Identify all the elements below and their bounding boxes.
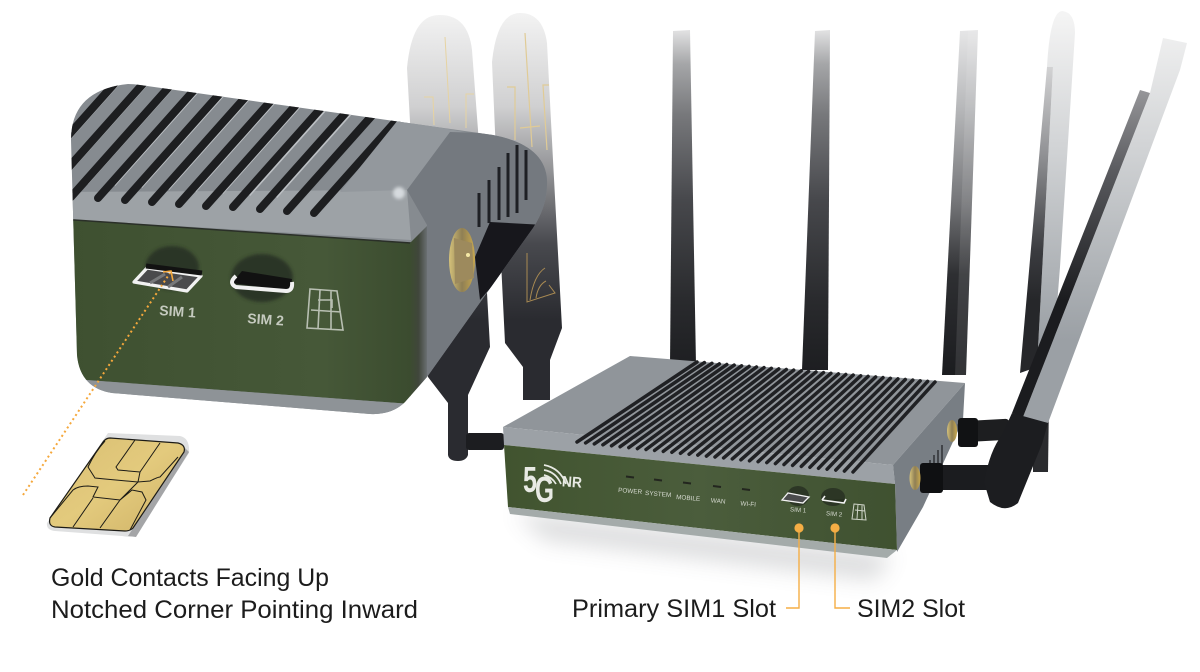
antenna 6 bbox=[1020, 11, 1075, 472]
inset side vents bbox=[479, 145, 526, 227]
callout: SIM2 slot bbox=[830, 523, 965, 623]
top plate margin bbox=[340, 120, 470, 192]
router body bbox=[503, 356, 965, 558]
inset heatsink fins bbox=[71, 84, 400, 217]
5G NR logo: G bbox=[535, 469, 554, 510]
paddle antenna 1 bbox=[407, 15, 490, 461]
inset side face bbox=[407, 132, 547, 377]
LED indicators and labels: POWER bbox=[618, 487, 643, 496]
caption: SIM orientation: Notched Corner Pointing Inward bbox=[51, 596, 418, 624]
front right antenna bbox=[984, 38, 1187, 508]
LED indicators and labels: SYSTEM bbox=[645, 490, 672, 499]
inset bottom band bbox=[86, 380, 404, 414]
callout: primary SIM1 slot: Primary SIM1 Slot bbox=[572, 595, 776, 623]
5G NR logo: 5 bbox=[523, 459, 537, 500]
left rear connector bbox=[466, 433, 504, 450]
gold contacts bbox=[50, 438, 184, 531]
upper right connector bbox=[947, 418, 1010, 447]
LED indicators and labels: MOBILE bbox=[676, 494, 700, 503]
LED indicators and labels: WI-FI bbox=[740, 500, 756, 509]
callout: primary SIM1 slot bbox=[572, 523, 804, 623]
LED indicators and labels: WAN bbox=[711, 497, 726, 506]
inset SIM labels: SIM 1 bbox=[159, 302, 197, 321]
shadow under router bbox=[515, 512, 892, 580]
caption: SIM orientation: Gold Contacts Facing Up bbox=[51, 564, 329, 592]
5G NR logo: NR bbox=[561, 473, 583, 492]
caption: SIM orientation bbox=[51, 564, 418, 624]
side vents bbox=[922, 445, 942, 488]
zoomed inset of SIM slots bbox=[71, 84, 547, 414]
SIM slots on router: SIM 1 bbox=[790, 506, 807, 515]
heatsink fins bbox=[577, 362, 935, 472]
inset SIM labels bbox=[160, 306, 284, 326]
inset front top band bbox=[60, 190, 411, 240]
inset antenna base bbox=[475, 222, 535, 300]
antenna 4 bbox=[802, 30, 830, 370]
inset SIM card icon bbox=[307, 289, 343, 330]
router front green panel bbox=[504, 445, 897, 550]
router top face bbox=[503, 356, 965, 465]
antenna 3 bbox=[670, 30, 696, 365]
LED indicators and labels bbox=[618, 476, 756, 509]
dotted insertion arrow bbox=[23, 271, 173, 495]
inset corner strip bbox=[410, 226, 427, 405]
inset SIM 1 slot bbox=[134, 246, 202, 291]
gold connector nut bbox=[449, 228, 475, 292]
callout: SIM2 slot: SIM2 Slot bbox=[857, 595, 965, 623]
SIM slots on router bbox=[782, 486, 866, 520]
inset SIM labels: SIM 2 bbox=[247, 310, 285, 329]
router front top band bbox=[503, 427, 895, 484]
SIM slots on router: SIM 2 bbox=[826, 510, 843, 519]
SIM card bbox=[47, 433, 189, 537]
router side face bbox=[893, 383, 965, 552]
paddle antenna 2 bbox=[492, 13, 562, 400]
router bottom band bbox=[508, 507, 897, 558]
antenna 5 bbox=[942, 30, 978, 375]
card body bbox=[47, 433, 189, 537]
inset green panel bbox=[60, 219, 411, 404]
5G NR logo bbox=[523, 459, 583, 510]
lower right connector bbox=[910, 463, 992, 493]
inset SIM 2 slot bbox=[231, 254, 293, 302]
